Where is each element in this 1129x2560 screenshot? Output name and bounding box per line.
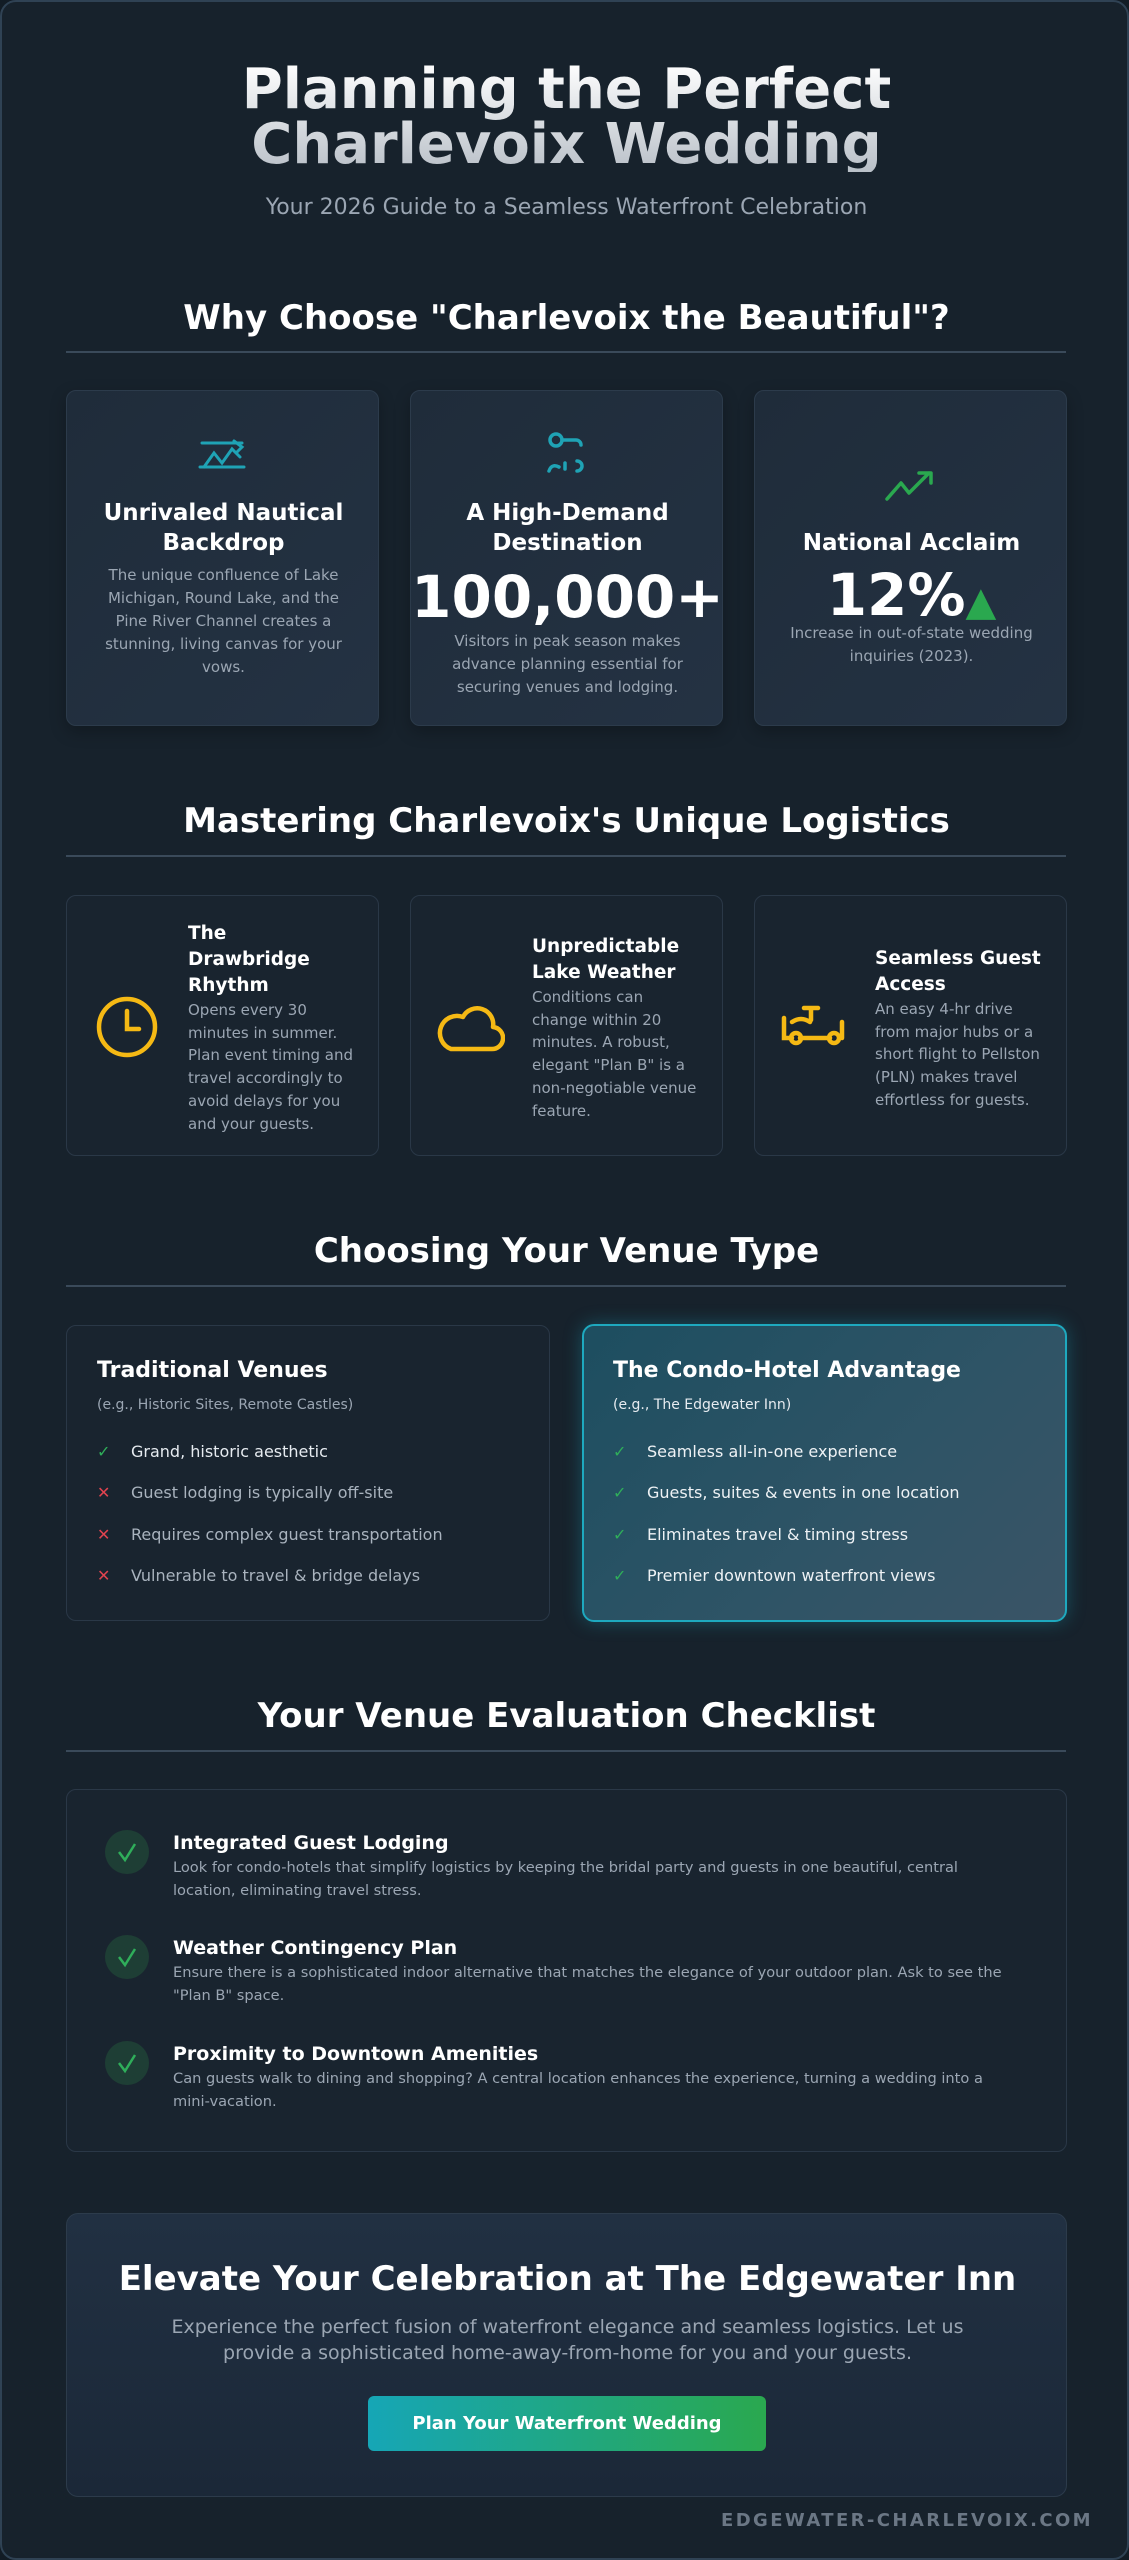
panel: call to action <box>66 2213 1067 2497</box>
button <box>368 2396 766 2451</box>
panel subtitle: (e.g., The Edgewater Inn) <box>613 1397 791 1413</box>
text: An easy 4-hr drive from major hubs or a short flight to Pellston (PLN) makes travel effortless for guests. <box>875 1000 1040 1109</box>
text <box>875 948 1041 1109</box>
text: Opens every 30 minutes in summer. Plan event timing and travel accordingly to avoid delays for you and your guests. <box>188 1001 353 1133</box>
card title <box>466 500 669 556</box>
item: guest lodging: Integrated Guest Lodging <box>173 1832 449 1854</box>
item: weather plan: Weather Contingency Plan <box>173 1937 457 1959</box>
list <box>97 1442 443 1585</box>
text: Drawbridge <box>188 949 310 970</box>
panel title: Traditional Venues <box>97 1358 328 1383</box>
list: Guests, suites & events in one location <box>647 1483 960 1502</box>
list: Eliminates travel & timing stress <box>647 1525 908 1544</box>
card: high demand <box>410 390 723 726</box>
button: Plan Your Waterfront Wedding <box>412 2413 722 2434</box>
item: weather plan: Ensure there is a sophisticated indoor alternative that matches the elegance of your outdoor plan. Ask to see the "Plan B" space. <box>173 1964 1002 2004</box>
icon: boat <box>198 439 246 469</box>
footer url: EDGEWATER-CHARLEVOIX.COM <box>721 2510 1093 2531</box>
list <box>613 1442 960 1585</box>
text: The <box>188 923 226 944</box>
CTA heading: Elevate Your Celebration at The Edgewater Inn <box>119 2259 1016 2299</box>
item: downtown: Proximity to Downtown Amenities <box>173 2043 538 2065</box>
panel title: The Condo-Hotel Advantage <box>613 1358 961 1383</box>
icon: car <box>782 1006 844 1046</box>
item: guest lodging <box>105 1830 958 1899</box>
list: ✕ <box>97 1483 110 1502</box>
card text: Visitors in peak season makes advance planning essential for securing venues and lodging. <box>452 632 683 696</box>
list: Seamless all-in-one experience <box>647 1442 897 1461</box>
card title: Backdrop <box>162 530 285 556</box>
heading: why choose: Why Choose "Charlevoix the Beautiful"? <box>183 298 950 338</box>
text: Seamless Guest <box>875 948 1041 969</box>
card: guest access <box>754 895 1067 1156</box>
stat: 100,000+ <box>411 563 724 631</box>
text: Unpredictable <box>532 936 679 957</box>
list: ✓ <box>97 1442 110 1461</box>
panel: condo-hotel advantage <box>582 1324 1067 1622</box>
item: downtown <box>105 2041 983 2110</box>
card title <box>104 500 343 556</box>
card text: Increase in out-of-state wedding inquiries (2023). <box>790 624 1033 665</box>
heading: logistics: Mastering Charlevoix's Unique Logistics <box>183 801 950 841</box>
panel subtitle: (e.g., Historic Sites, Remote Castles) <box>97 1397 353 1413</box>
item: guest lodging: Look for condo-hotels that simplify logistics by keeping the bridal party and guests in one beautiful, central location, eliminating travel stress. <box>173 1859 958 1899</box>
heading: checklist: Your Venue Evaluation Checklist <box>258 1696 875 1736</box>
card: national acclaim <box>754 390 1067 726</box>
list: ✓ <box>613 1566 626 1585</box>
card title: Destination <box>492 530 643 556</box>
card title: A High-Demand <box>466 500 669 526</box>
list: Premier downtown waterfront views <box>647 1566 935 1585</box>
subtitle: Your 2026 Guide to a Seamless Waterfront Celebration <box>266 195 867 220</box>
title: Planning the Perfect <box>242 57 891 122</box>
icon: clock <box>96 996 158 1058</box>
list: Vulnerable to travel & bridge delays <box>131 1566 420 1585</box>
text <box>188 923 353 1133</box>
list: ✓ <box>613 1483 626 1502</box>
panel: checklist <box>66 1789 1067 2152</box>
text: Conditions can change within 20 minutes. A robust, elegant "Plan B" is a non-negotiable venue feature. <box>532 988 696 1120</box>
item: weather plan <box>105 1935 1002 2004</box>
card title: National Acclaim <box>803 530 1020 556</box>
item: downtown: Can guests walk to dining and shopping? A central location enhances the experience, turning a wedding into a mini-vacation. <box>173 2070 983 2110</box>
list: Grand, historic aesthetic <box>131 1442 328 1461</box>
card: weather <box>410 895 723 1156</box>
text: Rhythm <box>188 975 269 996</box>
CTA text: Experience the perfect fusion of waterfront elegance and seamless logistics. Let us provide a sophisticated home-away-from-home for you and your guests. <box>171 2316 964 2364</box>
card: nautical backdrop <box>66 390 379 726</box>
stat: 12%▲ <box>827 561 996 629</box>
icon: cloud <box>438 1006 505 1052</box>
list: Guest lodging is typically off-site <box>131 1483 393 1502</box>
card title: Unrivaled Nautical <box>104 500 343 526</box>
panel: traditional venues <box>66 1325 550 1621</box>
title <box>2 62 1129 172</box>
card: drawbridge <box>66 895 379 1156</box>
list: ✕ <box>97 1525 110 1544</box>
list: ✕ <box>97 1566 110 1585</box>
text: Lake Weather <box>532 962 676 983</box>
icon: trend up <box>885 471 933 501</box>
title: Charlevoix Wedding <box>251 112 882 177</box>
list: Requires complex guest transportation <box>131 1525 443 1544</box>
list: ✓ <box>613 1525 626 1544</box>
text: Access <box>875 974 946 995</box>
card text: The unique confluence of Lake Michigan, Round Lake, and the Pine River Channel creates a stunning, living canvas for your vows. <box>105 566 342 676</box>
list: ✓ <box>613 1442 626 1461</box>
heading: venue type: Choosing Your Venue Type <box>314 1231 819 1271</box>
icon: people <box>547 432 584 473</box>
